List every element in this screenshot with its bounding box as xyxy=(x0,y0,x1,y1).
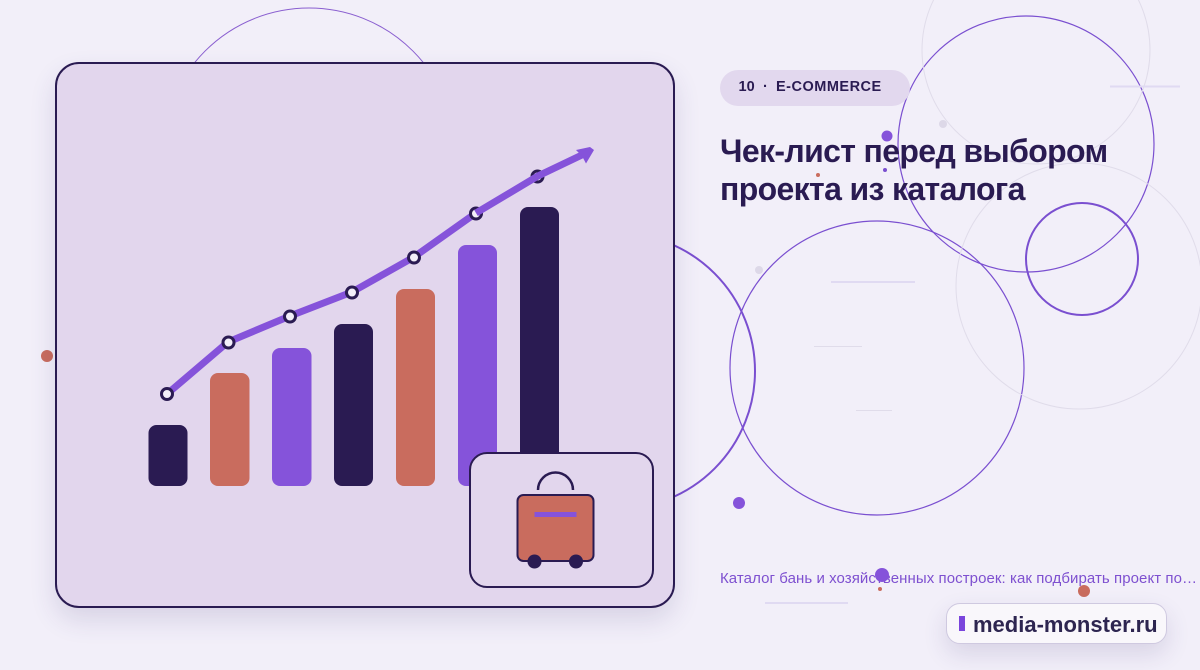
logo text: media-monster.ru xyxy=(973,612,1158,637)
subtitle: Каталог бань и хозяйственных построек: как подбирать проект по… xyxy=(720,570,1197,587)
title xyxy=(720,133,1108,207)
badge: category pill: · xyxy=(763,79,768,95)
title: проекта из каталога xyxy=(720,171,1025,207)
badge: category pill: E-COMMERCE xyxy=(776,79,882,95)
badge: category pill: 10 xyxy=(738,79,755,95)
bars xyxy=(148,207,559,486)
logo marker xyxy=(959,616,965,631)
panel: chart card xyxy=(55,62,675,608)
logo badge xyxy=(946,603,1167,644)
trend line xyxy=(162,147,594,400)
title: Чек-лист перед выбором xyxy=(720,133,1108,169)
badge: category pill xyxy=(720,70,910,106)
inset panel: shopping bag xyxy=(469,452,654,588)
